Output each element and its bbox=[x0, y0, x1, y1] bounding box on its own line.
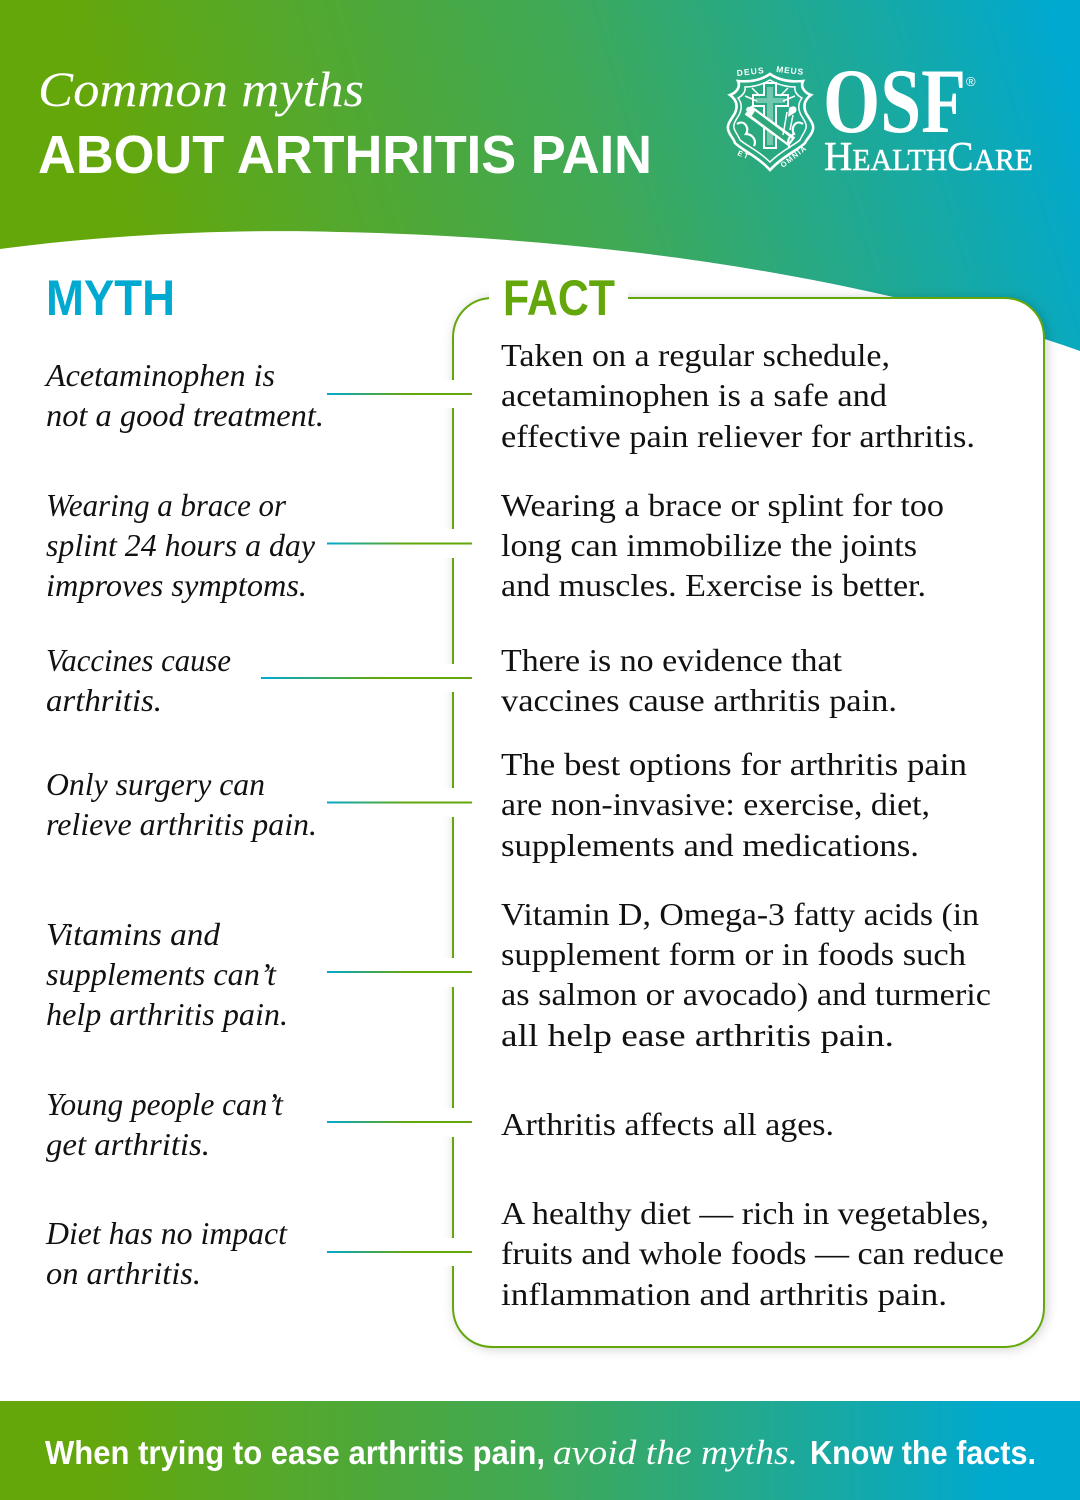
heading: myth: MYTH bbox=[46, 270, 175, 326]
fact 3: vaccines cause arthritis pain. bbox=[501, 682, 897, 718]
fact 2: long can immobilize the joints bbox=[501, 527, 917, 563]
fact 3: There is no evidence that bbox=[501, 642, 842, 678]
myth 7: Diet has no impact bbox=[45, 1215, 288, 1251]
heading: fact: FACT bbox=[503, 270, 615, 326]
fact 7: inflammation and arthritis pain. bbox=[501, 1276, 947, 1312]
myth 6: get arthritis. bbox=[46, 1126, 210, 1162]
fact 1: acetaminophen is a safe and bbox=[501, 377, 887, 413]
myth 6: Young people can’t bbox=[46, 1086, 284, 1122]
fact 2: Wearing a brace or splint for too bbox=[501, 487, 944, 523]
fact 2: and muscles. Exercise is better. bbox=[501, 567, 926, 603]
icon: shield crest: OMNIA bbox=[779, 144, 808, 170]
myth 1: Acetaminophen is bbox=[44, 357, 275, 393]
fact 1: Taken on a regular schedule, bbox=[501, 337, 890, 373]
footer text bbox=[45, 1433, 1036, 1472]
fact 4 bbox=[501, 746, 967, 863]
fact 7 bbox=[501, 1195, 1004, 1312]
icon: shield crest: DEUS bbox=[736, 65, 764, 78]
logo wordmark: OSF bbox=[823, 50, 966, 152]
fact 5: supplement form or in foods such bbox=[501, 936, 966, 972]
fact 4: are non-invasive: exercise, diet, bbox=[501, 786, 930, 822]
fact 6: Arthritis affects all ages. bbox=[501, 1106, 834, 1142]
logo: OSF HealthCare bbox=[728, 50, 1033, 179]
header banner bbox=[0, 0, 1080, 351]
footer text: When trying to ease arthritis pain, bbox=[45, 1434, 545, 1471]
myth 3: Vaccines cause bbox=[46, 642, 231, 678]
myth 4: Only surgery can bbox=[46, 766, 265, 802]
fact 5: as salmon or avocado) and turmeric bbox=[501, 976, 991, 1012]
fact 4: The best options for arthritis pain bbox=[501, 746, 967, 782]
myth 3: arthritis. bbox=[46, 682, 162, 718]
fact 5: Vitamin D, Omega-3 fatty acids (in bbox=[501, 896, 979, 932]
title bbox=[38, 61, 652, 185]
myth 5: help arthritis pain. bbox=[46, 996, 288, 1032]
logo wordmark: HEALTHCARE bbox=[824, 133, 1033, 179]
footer banner bbox=[0, 1401, 1080, 1500]
fact 3 bbox=[501, 642, 897, 718]
myth 2: improves symptoms. bbox=[46, 567, 307, 603]
myth 5 bbox=[46, 916, 288, 1032]
myth 4: relieve arthritis pain. bbox=[46, 806, 317, 842]
myth 2: splint 24 hours a day bbox=[46, 527, 316, 563]
myth 5: Vitamins and bbox=[46, 916, 221, 952]
myth 1 bbox=[44, 357, 324, 433]
fact 1 bbox=[501, 337, 975, 454]
fact 7: fruits and whole foods — can reduce bbox=[501, 1235, 1004, 1271]
footer text: avoid the myths. bbox=[553, 1433, 798, 1472]
myth 6 bbox=[46, 1086, 284, 1162]
footer text: Know the facts. bbox=[810, 1434, 1036, 1471]
fact 5 bbox=[501, 896, 991, 1053]
myth 5: supplements can’t bbox=[46, 956, 277, 992]
fact 4: supplements and medications. bbox=[501, 827, 919, 863]
fact 5: all help ease arthritis pain. bbox=[501, 1017, 894, 1053]
myth 4 bbox=[46, 766, 317, 842]
myth 7 bbox=[45, 1215, 288, 1291]
fact 7: A healthy diet — rich in vegetables, bbox=[501, 1195, 989, 1231]
icon: shield crest: ET bbox=[736, 149, 750, 161]
connector lines bbox=[261, 394, 472, 1252]
myth 1: not a good treatment. bbox=[46, 397, 324, 433]
myth 2 bbox=[46, 487, 316, 603]
title: Common myths bbox=[38, 61, 364, 117]
panel: fact card bbox=[430, 270, 1046, 1348]
icon: shield crest: MEUS bbox=[776, 64, 804, 77]
myth 7: on arthritis. bbox=[46, 1255, 201, 1291]
myth 2: Wearing a brace or bbox=[46, 487, 287, 523]
fact 2 bbox=[501, 487, 944, 603]
logo wordmark bbox=[823, 50, 1033, 179]
fact 1: effective pain reliever for arthritis. bbox=[501, 418, 975, 454]
icon: shield crest bbox=[728, 64, 813, 170]
myth 3 bbox=[46, 642, 231, 718]
title: ABOUT ARTHRITIS PAIN bbox=[38, 125, 652, 185]
logo wordmark: ® bbox=[966, 74, 976, 89]
